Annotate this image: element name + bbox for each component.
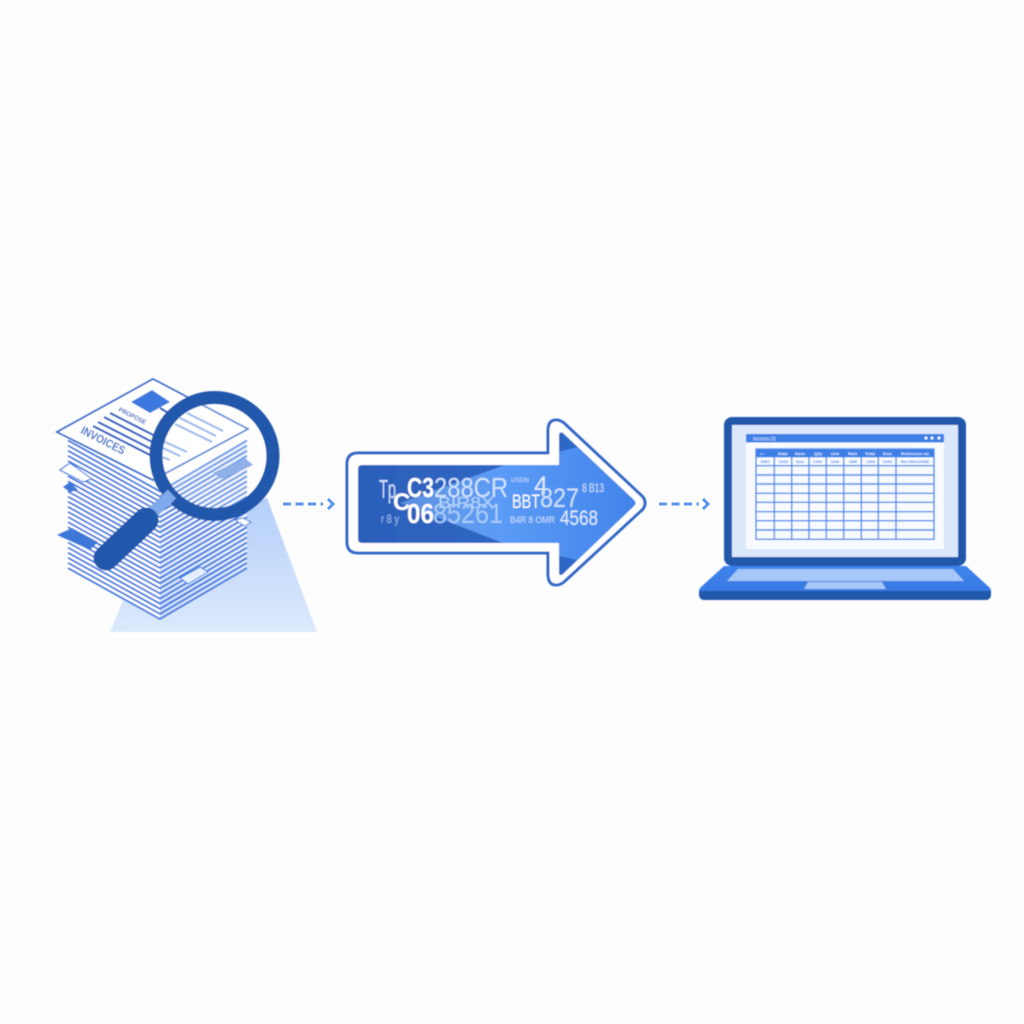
data table: Total <box>865 451 875 456</box>
infographic canvas <box>54 377 992 632</box>
magnifying glass <box>106 398 273 558</box>
scanned characters: 4 <box>534 472 548 500</box>
data table: Ref 000123456 <box>901 459 930 464</box>
scanned characters: 827 <box>540 483 579 513</box>
scanned characters: USDN <box>511 478 529 484</box>
data table: 0001 <box>761 459 771 464</box>
laptop base <box>699 566 991 600</box>
scanned characters: 4568 <box>560 507 598 530</box>
data table <box>756 449 934 539</box>
icon: invoice stack under magnifier <box>57 379 317 632</box>
conversion arrow <box>347 420 650 585</box>
data table: 0102 <box>779 459 789 464</box>
light beam inside arrow <box>400 447 636 560</box>
stack of paper sheets <box>68 440 247 619</box>
data table: Item <box>795 451 806 456</box>
dashed arrow: stack to converter <box>283 499 333 509</box>
data table: Qty <box>814 451 823 456</box>
scanned characters: r 8 y <box>381 512 399 526</box>
top invoice sheet: PROPOSE <box>117 407 148 427</box>
data table: Reference no <box>901 451 930 456</box>
application window <box>746 434 944 549</box>
arrow body <box>358 432 636 575</box>
icon: laptop with data table <box>699 417 991 600</box>
data table: Unit <box>831 459 840 464</box>
data table: Net <box>848 451 858 456</box>
application window: Invoices 01 <box>753 436 776 442</box>
data table: 1200 <box>866 459 876 464</box>
scanned characters: 288CR <box>434 472 508 503</box>
data table: Date <box>778 451 789 456</box>
arrow outline <box>347 420 645 585</box>
data table: 0103 <box>883 459 893 464</box>
scanned characters: BIR8X <box>438 495 494 512</box>
scanned characters: 8 B13 <box>582 481 604 495</box>
scanned characters: Tp <box>379 474 396 504</box>
scanned characters: C <box>393 489 410 516</box>
scanned characters: BBT <box>512 492 540 513</box>
data table: 1200 <box>813 459 823 464</box>
scanned characters: C3 <box>407 472 434 503</box>
light beam <box>110 498 317 632</box>
data table: 1000 <box>849 459 858 464</box>
data table: Item <box>796 459 804 464</box>
side tabs between sheets <box>57 463 251 584</box>
data table: Unit <box>831 451 840 456</box>
data table: Due <box>883 451 893 456</box>
scanned characters: B4R 8 OMR <box>510 515 555 525</box>
scanned characters: 06 <box>407 498 434 529</box>
top invoice sheet: INVOICES <box>79 425 127 458</box>
scanned characters <box>379 472 604 530</box>
dashed arrow: converter to laptop <box>659 499 708 509</box>
top invoice sheet <box>57 379 248 480</box>
scanned characters: 85261 <box>433 498 503 529</box>
data table: • • <box>760 451 765 456</box>
laptop screen <box>724 417 966 566</box>
